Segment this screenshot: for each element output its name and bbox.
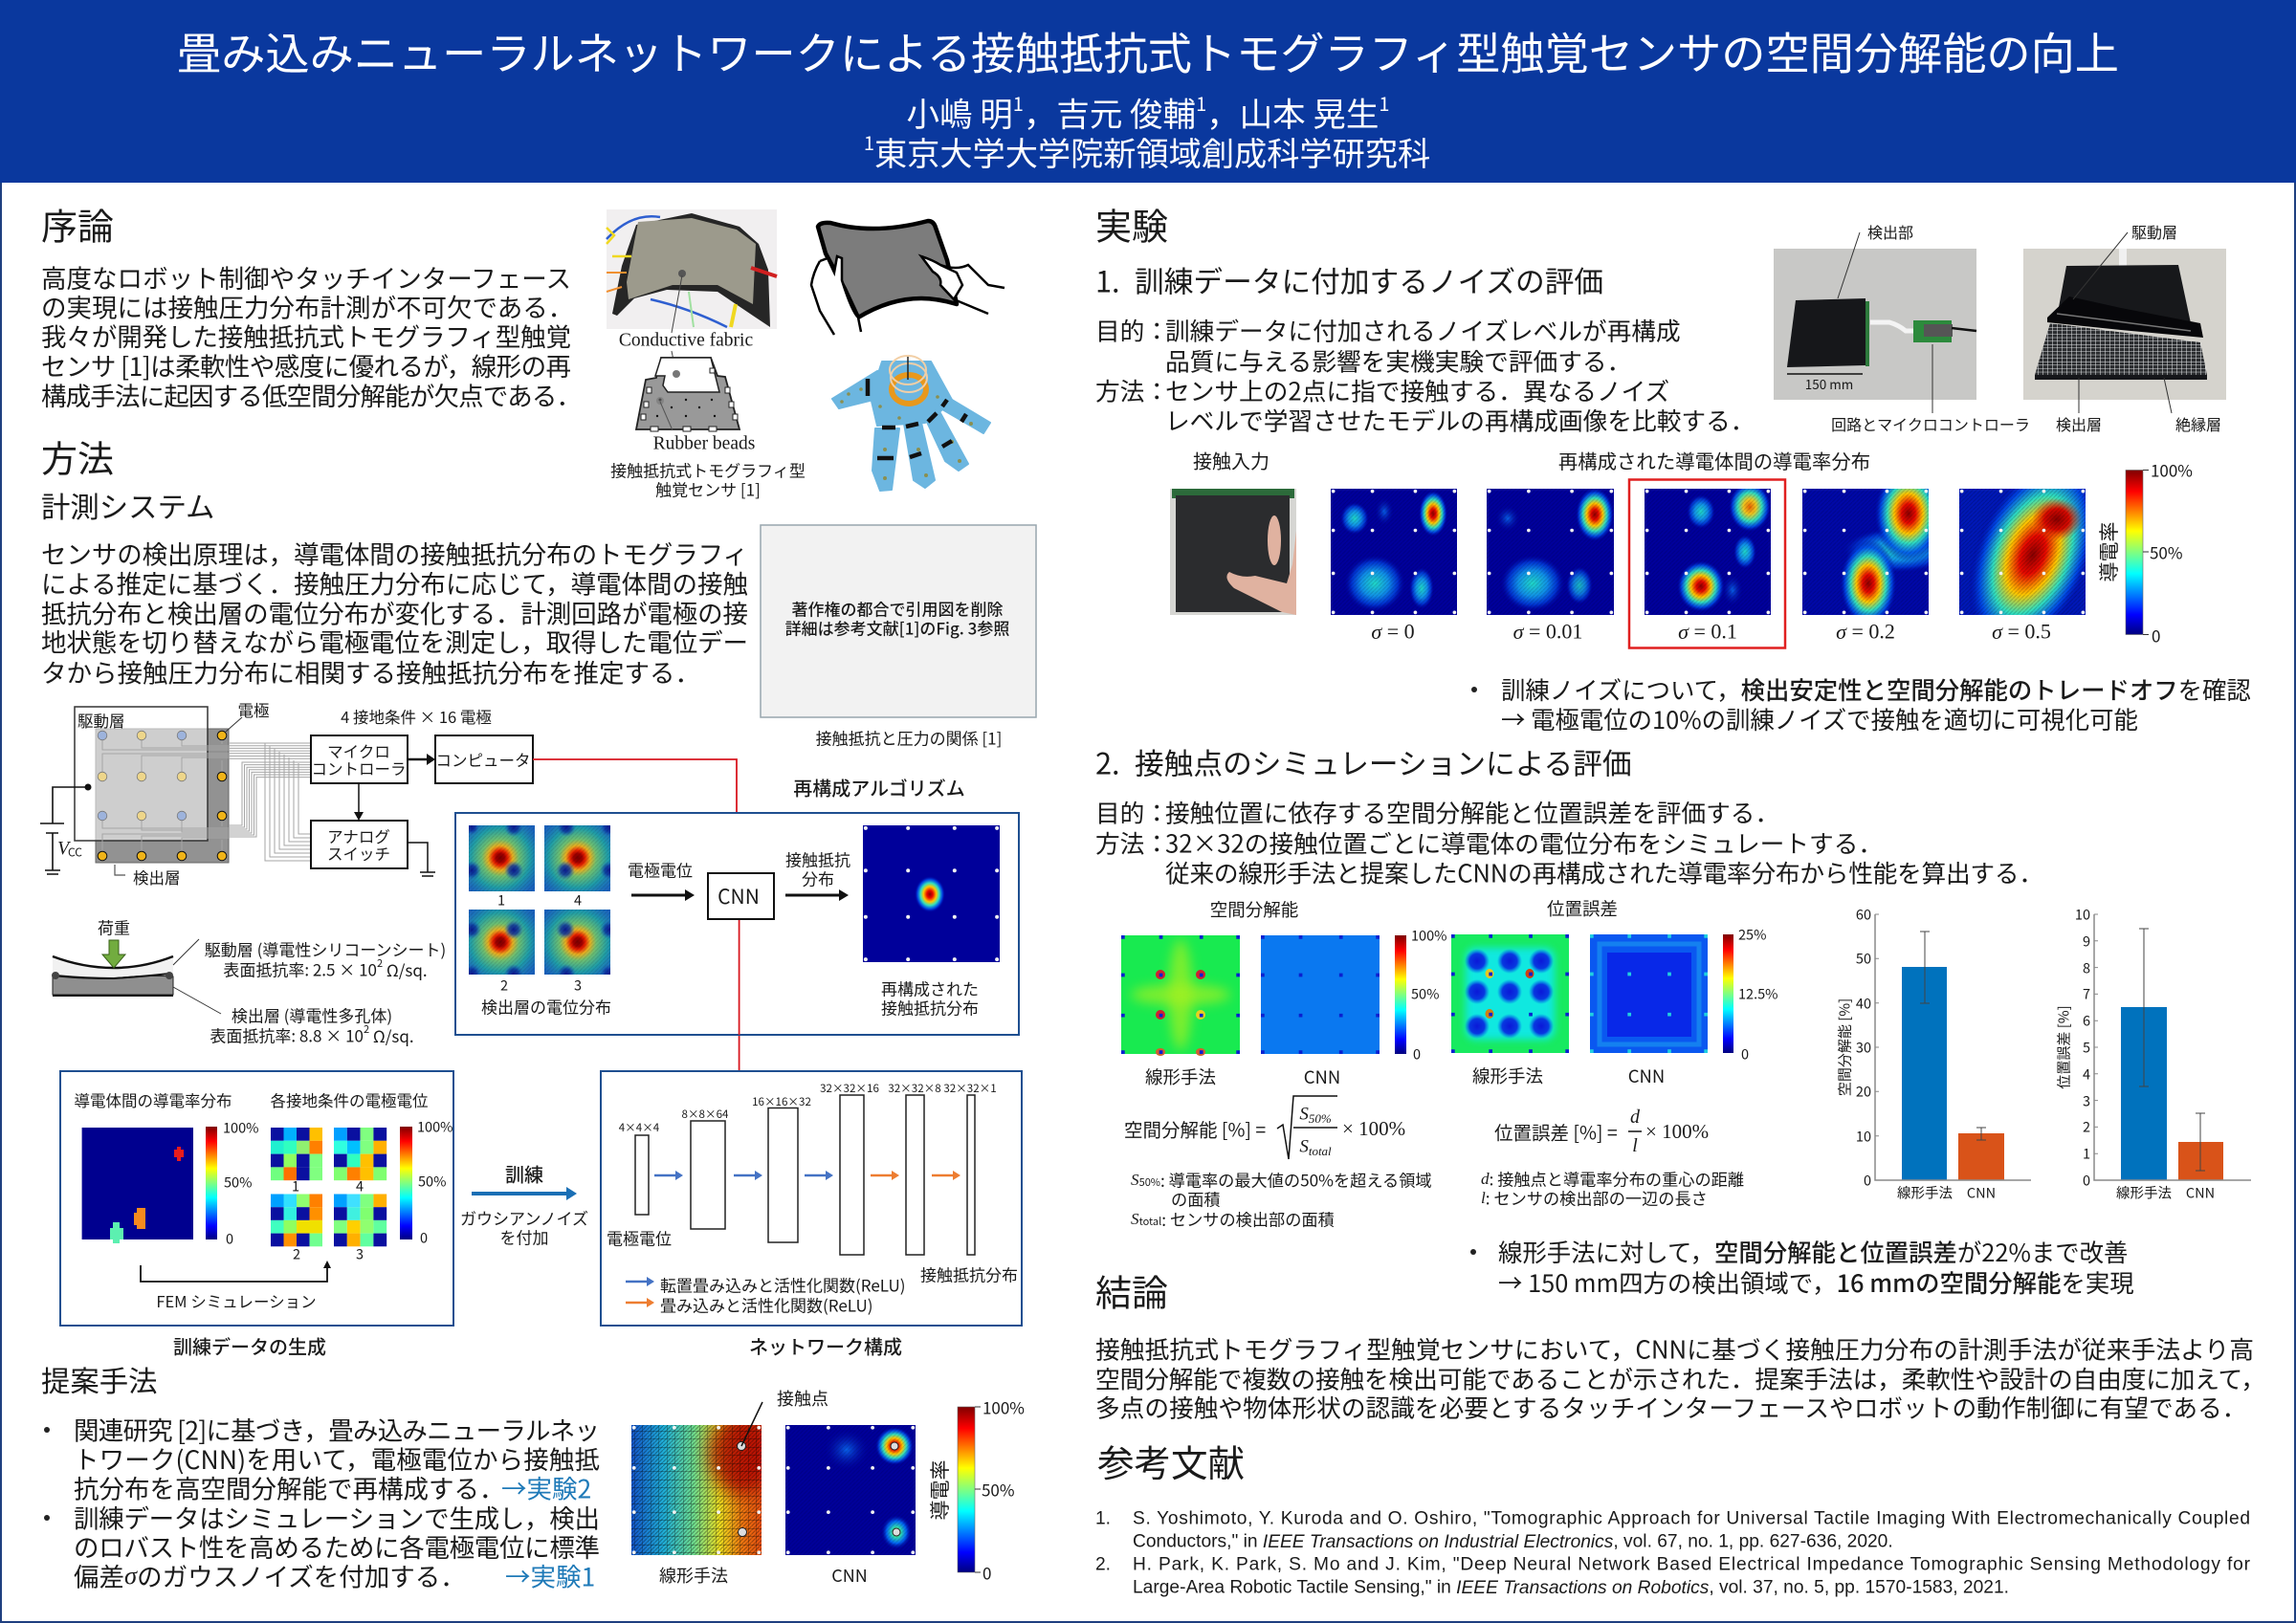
caption: tactile sensor second line: 触覚センサ [1] xyxy=(655,476,761,501)
authors: ，吉元 俊輔 xyxy=(1024,88,1196,136)
panel: reconstruction algorithm: 1 xyxy=(497,889,505,910)
formula: spatial resolution: total xyxy=(1309,1144,1332,1157)
formula notes: spatial resolution: 50% xyxy=(1139,1174,1160,1190)
caption: tactile sensor: 接触抵抗式トモグラフィ型 xyxy=(610,457,806,482)
connector: computer to network xyxy=(533,759,740,1071)
measurement system text: センサの検出原理は，導電体間の接触抵抗分布のトモグラフィ xyxy=(41,534,748,572)
icon: bendable sheet touched by hands xyxy=(811,221,1004,335)
bar chart: spatial resolution: 40 xyxy=(1856,993,1871,1014)
bar chart: spatial resolution: 0 xyxy=(1864,1171,1871,1190)
panel: reconstruction algorithm: 分布 xyxy=(802,866,834,889)
map labels: 線形手法 xyxy=(1145,1064,1216,1089)
introduction text: 構成手法に起因する低空間分解能が欠点である． xyxy=(41,376,582,413)
panel: network architecture: 電極電位 xyxy=(607,1226,672,1249)
experiment 1 conclusion xyxy=(1471,672,2251,736)
diagram: sensor cross-section under load: 表面抵抗率: 2.5 × 10 xyxy=(223,956,377,981)
heading: reconstruction algorithm: 再構成アルゴリズム xyxy=(793,773,965,801)
panel: reconstruction algorithm: CNN xyxy=(718,882,760,910)
diagram: measurement circuit: 4 接地条件 × 16 電極 xyxy=(341,705,492,728)
bar chart: spatial resolution: 10 xyxy=(1856,1127,1871,1146)
diagram: measurement circuit: 駆動層 xyxy=(77,709,124,732)
arrow: training: ガウシアンノイズ xyxy=(460,1205,588,1230)
potential map 4 xyxy=(544,825,610,891)
heatmap: sigma 0.01 xyxy=(1487,488,1614,615)
experiment 2 description: 32×32の接触位置ごとに導電体の電位分布をシミュレートする． xyxy=(1165,824,1883,861)
experiment 2 description xyxy=(1095,794,2043,889)
conclusion text: 接触抵抗式トモグラフィ型触覚センサにおいて，CNNに基づく接触圧力分布の計測手法が従来手法より高 xyxy=(1095,1331,2254,1366)
arrow: training: を付加 xyxy=(499,1224,549,1249)
diagram: sensor cross-section under load xyxy=(52,914,446,1046)
bar chart: position error: 2 xyxy=(2083,1117,2090,1136)
experiment 2 conclusion: → 150 mm四方の検出領域で，16 mmの空間分解能を実現 xyxy=(1498,1265,2134,1300)
potential map 3 xyxy=(544,910,610,975)
formula notes: spatial resolution: : xyxy=(1161,1207,1170,1230)
diagram: measurement circuit: コンピュータ xyxy=(436,748,530,771)
panel: training data generation: 4 xyxy=(356,1176,364,1195)
colorbar: conductivity: 0 xyxy=(2152,624,2160,647)
colorbar: 0 xyxy=(420,1228,428,1247)
references list: Large-Area Robotic Tactile Sensing," in IEEE Transactions on Robotics, vol. 37, no. 5, pp. 1570-1583, 2021. xyxy=(1133,1578,2009,1597)
subheading: experiment 1: 訓練データに付加するノイズの評価 xyxy=(1135,258,1603,300)
experiment 1 description: 方法： xyxy=(1095,373,1169,407)
heatmap: position error CNN xyxy=(1590,934,1708,1053)
colorbar: position error xyxy=(1723,924,1778,1064)
panel: network architecture: 16×16×32 xyxy=(752,1094,811,1109)
diagram: measurement circuit: マイクロ xyxy=(327,739,390,762)
icon: sensor glove on hand xyxy=(832,356,990,491)
proposed method text: トワーク(CNN)を用いて，電極電位から接触抵 xyxy=(74,1439,600,1477)
bar chart: position error xyxy=(2053,905,2251,1203)
panel: reconstruction algorithm: 接触抵抗分布 xyxy=(881,995,979,1020)
formula: spatial resolution: 50% xyxy=(1309,1111,1332,1125)
authors: 1 xyxy=(1379,88,1390,117)
diagram: measurement circuit: コントローラ xyxy=(312,757,406,779)
experiment 1 description: センサ上の2点に指で接触する．異なるノイズ xyxy=(1165,373,1669,407)
section: introduction heading: 序論 xyxy=(41,197,114,251)
colorbar: conductivity xyxy=(2094,457,2193,647)
panel: network architecture: 畳み込みと活性化関数(ReLU) xyxy=(660,1293,872,1316)
highlighted box: sigma 0.1 xyxy=(1629,480,1785,648)
panel: reconstruction algorithm: 3 xyxy=(574,976,582,995)
section: conclusion heading: 結論 xyxy=(1095,1264,1168,1316)
map labels xyxy=(1145,1064,1665,1089)
experiment 1 description: レベルで学習させたモデルの再構成画像を比較する． xyxy=(1165,402,1755,438)
diagram: measurement circuit: 検出層 xyxy=(133,866,180,888)
photo: sensor and circuit: 150 mm xyxy=(1805,374,1853,393)
subheading: experiment 2: 2. xyxy=(1095,740,1120,782)
diagram: sensor cross-section under load: Ω/sq. xyxy=(383,956,428,981)
caption: training data: 訓練データの生成 xyxy=(173,1331,326,1360)
bar chart: position error: 9 xyxy=(2083,932,2090,951)
heatmap: sigma 0.5 xyxy=(1959,489,2086,615)
measurement system text xyxy=(41,534,748,691)
formula: spatial resolution xyxy=(1124,1096,1405,1159)
measurement system text: タから接触圧力分布に相関する接触抵抗分布を推定する． xyxy=(41,652,700,691)
panel: network architecture: 32×32×8 xyxy=(888,1081,941,1096)
heatmap: sigma 0 xyxy=(1331,489,1457,615)
affiliation: 1 xyxy=(864,128,874,155)
colorbar: spatial resolution xyxy=(1395,926,1446,1064)
formula notes: spatial resolution: : xyxy=(1160,1167,1169,1192)
section: experiments heading: 実験 xyxy=(1095,197,1168,251)
subheading: experiment 2: 接触点のシミュレーションによる評価 xyxy=(1135,740,1632,782)
placeholder: removed copyright figure xyxy=(761,525,1036,717)
panel: training data generation: 3 xyxy=(356,1243,364,1264)
potential map 2 xyxy=(469,910,535,975)
formula notes: spatial resolution xyxy=(1131,1167,1432,1230)
panel: reconstruction algorithm: 再構成された xyxy=(881,976,979,1000)
heatmap: sigma 0.2 xyxy=(1802,489,1929,615)
conclusion text: 空間分解能で複数の接触を検出可能であることが示された．提案手法は，柔軟性や設計の自由度に加えて， xyxy=(1095,1360,2265,1396)
experiment 1 description xyxy=(1095,312,1755,438)
subheading: experiment 1: 1. xyxy=(1095,258,1120,300)
photo: touch input xyxy=(1170,489,1296,615)
experiment 2 description: 接触位置に依存する空間分解能と位置誤差を評価する． xyxy=(1165,794,1779,830)
measurement system text: 地状態を切り替えながら電極電位を測定し，取得した電位デー xyxy=(41,622,748,660)
panel: network architecture: 32×32×16 xyxy=(820,1081,879,1096)
section: methods heading: 方法 xyxy=(41,430,114,482)
arrow: training: 訓練 xyxy=(505,1159,543,1188)
figure: linear vs CNN reconstruction: 100% xyxy=(982,1394,1025,1419)
affiliation: 東京大学大学院新領域創成科学研究科 xyxy=(874,127,1430,175)
figure: linear vs CNN reconstruction: 50% xyxy=(982,1477,1015,1502)
references list: 2. xyxy=(1095,1555,1111,1574)
formula: spatial resolution: 空間分解能 [%] = xyxy=(1124,1115,1266,1142)
experiment 2 description: 従来の線形手法と提案したCNNの再構成された導電率分布から性能を算出する． xyxy=(1165,855,2043,889)
heatmap: spatial resolution linear xyxy=(1121,935,1240,1056)
experiment 1 description: 訓練データに付加されるノイズレベルが再構成 xyxy=(1165,312,1681,348)
proposed method text: 関連研究 [2]に基づき，畳み込みニューラルネッ xyxy=(74,1410,600,1448)
caption: contact input: 接触入力 xyxy=(1193,446,1269,474)
diagram: sensor cross-section under load: 2 xyxy=(377,955,383,971)
panel: training data generation: FEM シミュレーション xyxy=(156,1289,317,1312)
experiment 1 conclusion: → 電極電位の10%の訓練ノイズで接触を適切に可視化可能 xyxy=(1501,702,2138,736)
bar chart: position error: 1 xyxy=(2083,1144,2090,1163)
panel: training data generation xyxy=(60,1071,453,1326)
panel: reconstruction algorithm: 検出層の電位分布 xyxy=(481,995,611,1018)
sigma labels xyxy=(1371,620,2051,643)
photo: sensor and circuit: 検出部 xyxy=(1867,220,1913,243)
map labels: CNN xyxy=(1304,1064,1340,1089)
colorbar: spatial resolution: 50% xyxy=(1411,983,1439,1004)
conclusion text: 多点の接触や物体形状の認識を必要とするタッチインターフェースやロボットの動作制御に有望である． xyxy=(1095,1389,2246,1425)
sigma labels: σ = 0.5 xyxy=(1992,620,2051,643)
colorbar: conductivity: 100% xyxy=(2151,457,2193,482)
formula: spatial resolution: × 100% xyxy=(1342,1117,1405,1140)
authors: 1 xyxy=(1013,88,1024,117)
panel: network architecture xyxy=(601,1071,1022,1326)
electrode grid 1 xyxy=(271,1128,322,1180)
map labels: CNN xyxy=(1628,1064,1665,1088)
colorbar: 0 xyxy=(226,1228,233,1249)
figure: linear vs CNN reconstruction: 0 xyxy=(982,1561,991,1584)
figure: tactile sensor prototype photo and diagram xyxy=(607,209,806,482)
proposed method text xyxy=(44,1410,600,1593)
introduction text: 高度なロボット制御やタッチインターフェース xyxy=(41,258,571,296)
formula notes: spatial resolution: total xyxy=(1139,1214,1161,1229)
figure: tactile sensor prototype photo and diagram: Conductive fabric xyxy=(619,331,753,350)
authors: 小嶋 明 xyxy=(906,88,1013,136)
introduction text: センサ [1]は柔軟性や感度に優れるが，線形の再 xyxy=(41,346,571,384)
bar chart: spatial resolution: 空間分解能 [%] xyxy=(1835,998,1854,1096)
panel: reconstruction algorithm xyxy=(455,813,1019,1035)
bar chart: spatial resolution: 30 xyxy=(1856,1037,1871,1058)
figure: linear vs CNN reconstruction: 接触点 xyxy=(777,1386,828,1411)
experiment 1 description: 目的： xyxy=(1095,312,1169,348)
photo: sensor and circuit: 回路とマイクロコントローラ xyxy=(1831,412,2030,435)
photo: sensor and circuit xyxy=(1774,220,2030,435)
proposed method text: →実験1 xyxy=(505,1557,595,1593)
heatmap: position error linear xyxy=(1451,934,1569,1053)
formula: position error: × 100% xyxy=(1645,1120,1709,1143)
diagram: measurement circuit: V xyxy=(57,838,72,859)
conductivity map xyxy=(82,1128,193,1243)
bar chart: position error: 3 xyxy=(2083,1090,2090,1111)
bar chart: position error: 位置誤差 [%] xyxy=(2053,1005,2074,1089)
experiment 2 description: 目的： xyxy=(1095,794,1169,830)
heatmap: spatial resolution CNN xyxy=(1261,935,1380,1054)
diagram: sensor cross-section under load: 駆動層 (導電性シリコーンシート) xyxy=(205,937,446,960)
colorbar xyxy=(206,1117,258,1249)
panel: network architecture: 32×32×1 xyxy=(943,1081,997,1096)
sigma labels: σ = 0.1 xyxy=(1678,620,1737,643)
heading: spatial resolution: 空間分解能 xyxy=(1210,897,1298,922)
bar chart: spatial resolution: CNN xyxy=(1967,1182,1996,1203)
formula notes: spatial resolution: S xyxy=(1131,1209,1139,1228)
panel: training data generation: 各接地条件の電極電位 xyxy=(270,1088,429,1111)
photo: sensor layers: 駆動層 xyxy=(2131,220,2177,243)
bar chart: position error: 8 xyxy=(2083,958,2090,977)
electrode grid 4 xyxy=(334,1128,386,1180)
formula notes: position error: l: センサの検出部の一辺の長さ xyxy=(1481,1186,1708,1209)
colorbar: spatial resolution: 0 xyxy=(1413,1044,1421,1064)
subheading: measurement system: 計測システム xyxy=(41,484,214,526)
panel: reconstruction algorithm: 2 xyxy=(500,976,508,995)
bar chart: position error: 5 xyxy=(2083,1037,2090,1058)
colorbar: conductivity: 50% xyxy=(2150,539,2183,564)
references list: S. Yoshimoto, Y. Kuroda and O. Oshiro, "Tomographic Approach for Universal Tactile Imaging With Electromechanically Coupled xyxy=(1133,1509,2250,1528)
experiment 1 conclusion: 訓練ノイズについて，検出安定性と空間分解能のトレードオフを確認 xyxy=(1501,672,2251,707)
heading: position error: 位置誤差 xyxy=(1547,896,1618,921)
diagram: measurement circuit: アナログ xyxy=(327,824,390,847)
arrow: training xyxy=(460,1159,588,1249)
bar chart: position error: 7 xyxy=(2083,983,2090,1004)
bar chart: spatial resolution xyxy=(1835,905,2031,1203)
diagram: sensor cross-section under load: 検出層 (導電性多孔体) xyxy=(232,1002,392,1027)
bar chart: position error: 4 xyxy=(2083,1064,2090,1085)
panel: network architecture: 8×8×64 xyxy=(682,1107,729,1122)
colorbar: position error: 0 xyxy=(1741,1044,1749,1064)
formula: position error: l xyxy=(1632,1135,1638,1156)
photo: sensor layers: 検出層 xyxy=(2056,412,2102,435)
formula notes: spatial resolution: の面積 xyxy=(1171,1186,1221,1211)
proposed method text: 訓練データはシミュレーションで生成し，検出 xyxy=(74,1498,600,1536)
photo: sensor layers: 絶縁層 xyxy=(2175,412,2221,435)
colorbar: 50% xyxy=(418,1171,446,1192)
experiment 1 description: 品質に与える影響を実機実験で評価する． xyxy=(1165,342,1631,379)
formula notes: spatial resolution: 導電率の最大値の50%を超える領域 xyxy=(1169,1167,1432,1192)
panel: reconstruction algorithm: 4 xyxy=(574,889,582,910)
authors: ，山本 晃生 xyxy=(1206,88,1379,136)
header banner xyxy=(0,0,2296,183)
formula notes: spatial resolution: センサの検出部の面積 xyxy=(1170,1207,1335,1230)
panel: training data generation: 2 xyxy=(293,1243,300,1264)
bar chart: spatial resolution: 50 xyxy=(1856,949,1871,968)
diagram: measurement circuit: スイッチ xyxy=(327,842,390,865)
figure: linear vs CNN reconstruction: 導電率 xyxy=(925,1459,954,1521)
photo: sensor layers xyxy=(2023,220,2226,435)
colorbar: 50% xyxy=(224,1173,252,1192)
diagram: measurement circuit xyxy=(40,698,533,888)
bar chart: position error: 10 xyxy=(2075,905,2090,924)
figure: linear vs CNN reconstruction: 線形手法 xyxy=(659,1563,728,1588)
formula notes: position error: d: 接触点と導電率分布の重心の距離 xyxy=(1481,1167,1744,1190)
potential map 1 xyxy=(469,825,535,891)
panel: network architecture: 接触抵抗分布 xyxy=(920,1262,1018,1285)
references list: 1. xyxy=(1095,1509,1111,1528)
diagram: sensor cross-section under load: 表面抵抗率: 8.8 × 10 xyxy=(210,1023,364,1046)
diagram: sensor cross-section under load: 荷重 xyxy=(98,914,130,939)
title: 畳み込みニューラルネットワークによる接触抵抗式トモグラフィ型触覚センサの空間分解能の向上 xyxy=(177,19,2119,82)
caption: contact resistance vs pressure: 接触抵抗と圧力の関係 [1] xyxy=(816,725,1002,750)
references list xyxy=(1095,1509,2251,1597)
sigma labels: σ = 0.2 xyxy=(1836,620,1895,643)
bar chart: spatial resolution: 60 xyxy=(1856,905,1871,924)
formula: position error: 位置誤差 [%] = xyxy=(1494,1117,1618,1146)
colorbar: 100% xyxy=(417,1117,453,1136)
colorbar: position error: 12.5% xyxy=(1738,983,1778,1004)
panel: training data generation: 1 xyxy=(292,1176,299,1195)
figure: linear vs CNN reconstruction: CNN xyxy=(831,1563,868,1588)
conclusion text xyxy=(1095,1331,2265,1425)
proposed method text: 抗分布を高空間分解能で再構成する． xyxy=(74,1469,505,1505)
sigma labels: σ = 0.01 xyxy=(1513,620,1582,643)
panel: reconstruction algorithm: 接触抵抗 xyxy=(785,847,850,870)
subheading: proposed method: 提案手法 xyxy=(41,1358,158,1400)
panel: reconstruction algorithm: 電極電位 xyxy=(628,857,693,882)
caption: network: ネットワーク構成 xyxy=(749,1331,902,1360)
references list: H. Park, K. Park, S. Mo and J. Kim, "Deep Neural Network Based Electrical Impedance Tomographic Sensing Methodology for xyxy=(1133,1555,2251,1574)
formula notes: position error xyxy=(1481,1167,1744,1209)
bar chart: position error: 0 xyxy=(2083,1171,2090,1190)
references list: Conductors," in IEEE Transactions on Industrial Electronics, vol. 67, no. 1, pp. 627-636, 2020. xyxy=(1133,1532,1893,1551)
panel: network architecture: 4×4×4 xyxy=(619,1120,660,1135)
heatmap: sigma 0.1 xyxy=(1645,482,1771,615)
formula: position error xyxy=(1494,1107,1709,1156)
colorbar: position error: 25% xyxy=(1738,924,1766,945)
figure: linear vs CNN reconstruction xyxy=(631,1386,1025,1588)
colorbar xyxy=(400,1117,453,1247)
diagram: measurement circuit: CC xyxy=(68,844,82,861)
diagram: sensor cross-section under load: Ω/sq. xyxy=(369,1023,414,1046)
bar chart: spatial resolution: 20 xyxy=(1856,1081,1871,1102)
proposed method text: 偏差σのガウスノイズを付加する． xyxy=(74,1557,466,1593)
bar chart: position error: 線形手法 xyxy=(2116,1182,2172,1203)
electrode grid 3 xyxy=(334,1194,386,1246)
diagram: measurement circuit: 電極 xyxy=(237,698,270,721)
formula: spatial resolution: S xyxy=(1299,1136,1309,1157)
colorbar: 100% xyxy=(223,1117,258,1138)
colorbar: spatial resolution: 100% xyxy=(1411,926,1446,945)
figure: tactile sensor prototype photo and diagram: Rubber beads xyxy=(653,434,755,453)
formula: position error: d xyxy=(1630,1107,1641,1128)
formula: spatial resolution: S xyxy=(1299,1104,1309,1125)
proposed method text: のロバスト性を高めるために各電極電位に標準 xyxy=(74,1527,600,1565)
section: references heading: 参考文献 xyxy=(1097,1435,1245,1488)
panel: network architecture: 転置畳み込みと活性化関数(ReLU) xyxy=(660,1272,905,1297)
panel: training data generation: 導電体間の導電率分布 xyxy=(75,1088,232,1111)
sigma labels: σ = 0 xyxy=(1371,620,1415,643)
authors: 1 xyxy=(1196,88,1206,117)
placeholder: removed copyright figure: 詳細は参考文献[1]のFig. 3参照 xyxy=(785,616,1009,639)
experiment 2 description: 方法： xyxy=(1095,824,1169,861)
output conductivity map xyxy=(863,825,1000,962)
caption: reconstructed distribution: 再構成された導電体間の導電率分布 xyxy=(1558,446,1870,474)
colorbar: conductivity: 導電率 xyxy=(2094,522,2123,581)
measurement system text: 抵抗分布と検出層の電位分布が変化する．計測回路が電極の接 xyxy=(41,593,748,631)
placeholder: removed copyright figure: 著作権の都合で引用図を削除 xyxy=(792,597,1003,620)
proposed method text: →実験2 xyxy=(501,1469,591,1505)
map labels: 線形手法 xyxy=(1472,1064,1543,1088)
experiment 2 conclusion: 線形手法に対して，空間分解能と位置誤差が22%まで改善 xyxy=(1498,1235,2128,1269)
bar chart: position error: 6 xyxy=(2083,1010,2090,1031)
formula notes: spatial resolution: S xyxy=(1131,1171,1139,1188)
electrode grid 2 xyxy=(271,1194,322,1246)
introduction text xyxy=(41,258,582,413)
bar chart: spatial resolution: 線形手法 xyxy=(1897,1182,1953,1203)
measurement system text: による推定に基づく．接触圧力分布に応じて，導電体間の接触 xyxy=(41,564,748,601)
bar chart: position error: CNN xyxy=(2186,1182,2215,1203)
diagram: sensor cross-section under load: 2 xyxy=(364,1021,369,1037)
introduction text: 我々が開発した接触抵抗式トモグラフィ型触覚 xyxy=(41,317,571,354)
introduction text: の実現には接触圧力分布計測が不可欠である． xyxy=(41,287,573,325)
experiment 2 conclusion xyxy=(1470,1235,2134,1300)
